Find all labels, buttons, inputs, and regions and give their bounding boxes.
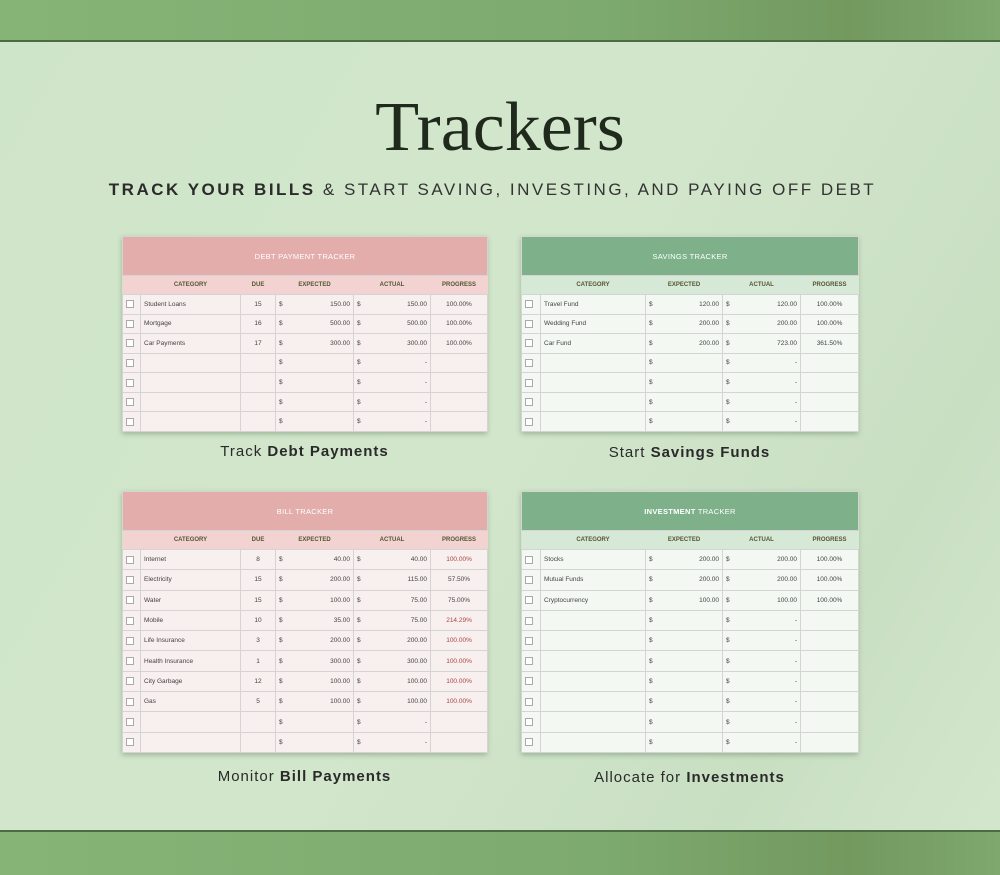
panel: savings tracker: $ (726, 340, 730, 347)
panel: debt payment tracker: 300.00 (407, 340, 427, 347)
panel: investment tracker: - (795, 617, 797, 624)
caption: savings: Start Savings Funds (609, 444, 770, 461)
panel: bill tracker: 12 (254, 678, 262, 685)
panel: debt payment tracker: 500.00 (407, 320, 427, 327)
panel: savings tracker (521, 236, 858, 432)
panel: savings tracker: $ (649, 320, 653, 327)
panel: bill tracker: 40.00 (334, 556, 350, 563)
panel: bill tracker: 5 (256, 698, 260, 705)
panel: investment tracker: ACTUAL (749, 537, 774, 543)
panel: investment tracker: EXPECTED (668, 537, 700, 543)
panel: bill tracker: 100.00% (446, 637, 472, 644)
panel: bill tracker: 214.29% (446, 617, 472, 624)
panel: investment tracker: 200.00 (699, 576, 719, 583)
panel: savings tracker: $ (726, 359, 730, 366)
panel: savings tracker: Car Fund (544, 340, 571, 347)
panel: investment tracker: 100.00% (817, 556, 842, 563)
panel: investment tracker: $ (726, 739, 730, 746)
panel: bill tracker: $ (279, 576, 283, 583)
panel: investment tracker: 100.00% (817, 576, 842, 583)
panel: savings tracker: ACTUAL (749, 282, 774, 288)
panel: debt payment tracker: 15 (254, 301, 262, 308)
panel: savings tracker: 120.00 (777, 301, 797, 308)
panel: investment tracker: - (795, 637, 797, 644)
panel: savings tracker: PROGRESS (813, 282, 847, 288)
panel: investment tracker: - (795, 678, 797, 685)
panel: investment tracker: $ (726, 617, 730, 624)
panel: debt payment tracker: 300.00 (330, 340, 350, 347)
panel: bill tracker: $ (279, 637, 283, 644)
panel: debt payment tracker: - (425, 379, 427, 386)
panel: investment tracker: 100.00 (699, 597, 719, 604)
panel: investment tracker: Cryptocurrency (544, 597, 588, 604)
panel: debt payment tracker: Mortgage (144, 320, 171, 327)
panel: investment tracker: INVESTMENT TRACKER (644, 506, 736, 516)
panel: bill tracker: 100.00 (330, 597, 350, 604)
panel: bill tracker: 100.00 (330, 698, 350, 705)
panel: bill tracker: $ (279, 719, 283, 726)
panel: debt payment tracker: $ (279, 320, 283, 327)
panel: debt payment tracker: ACTUAL (380, 282, 404, 288)
panel: investment tracker: - (795, 739, 797, 746)
panel: investment tracker: $ (649, 658, 653, 665)
panel: bill tracker: Life Insurance (144, 637, 185, 644)
panel: bill tracker: $ (357, 637, 361, 644)
panel: bill tracker: Internet (144, 556, 166, 563)
panel: bill tracker: $ (279, 597, 283, 604)
caption: debt: Track Debt Payments (220, 443, 389, 460)
panel: bill tracker: $ (357, 617, 361, 624)
panel: debt payment tracker: $ (279, 301, 283, 308)
panel: savings tracker: $ (726, 399, 730, 406)
panel: bill tracker: 75.00 (411, 617, 427, 624)
panel: savings tracker: - (795, 359, 797, 366)
panel: investment tracker: $ (726, 576, 730, 583)
panel: investment tracker: - (795, 719, 797, 726)
panel: investment tracker: $ (726, 678, 730, 685)
panel: savings tracker: $ (649, 340, 653, 347)
caption: bills: Monitor Bill Payments (218, 768, 391, 785)
panel: savings tracker: 200.00 (699, 340, 719, 347)
panel: bill tracker: 300.00 (407, 658, 427, 665)
panel: bill tracker (122, 491, 487, 753)
panel: debt payment tracker: 16 (254, 320, 262, 327)
caption: investments: Allocate for Investments (594, 769, 785, 786)
panel: debt payment tracker: $ (357, 340, 361, 347)
panel: savings tracker: Wedding Fund (544, 320, 586, 327)
panel: investment tracker: - (795, 658, 797, 665)
panel: savings tracker: $ (649, 418, 653, 425)
panel: savings tracker: SAVINGS TRACKER (652, 252, 728, 260)
panel: bill tracker: 200.00 (407, 637, 427, 644)
panel: debt payment tracker: DEBT PAYMENT TRACKER (255, 252, 355, 260)
panel: investment tracker: $ (649, 556, 653, 563)
panel: debt payment tracker: $ (357, 379, 361, 386)
panel: investment tracker: PROGRESS (812, 537, 847, 543)
panel: investment tracker (521, 491, 858, 753)
panel: debt payment tracker: DUE (252, 282, 264, 288)
panel: investment tracker: $ (649, 678, 653, 685)
panel: savings tracker: EXPECTED (668, 282, 700, 288)
panel: savings tracker: - (795, 399, 797, 406)
panel: bill tracker: - (425, 739, 427, 746)
panel: savings tracker: 361.50% (817, 340, 842, 347)
panel: investment tracker: $ (726, 597, 730, 604)
panel: bill tracker: $ (357, 576, 361, 583)
panel: bill tracker: 75.00 (411, 597, 427, 604)
panel: bill tracker: 100.00% (446, 698, 472, 705)
panel: bill tracker: $ (357, 597, 361, 604)
panel: investment tracker: $ (726, 658, 730, 665)
panel: bill tracker: 1 (256, 658, 260, 665)
panel: savings tracker: 723.00 (777, 340, 797, 347)
panel: bill tracker: Electricity (144, 576, 172, 583)
panel: bill tracker: 8 (256, 556, 260, 563)
panel: debt payment tracker: $ (279, 379, 283, 386)
panel: bill tracker: - (425, 719, 427, 726)
title: Trackers (375, 89, 625, 166)
panel: savings tracker: Travel Fund (544, 301, 578, 308)
panel: bill tracker: Water (144, 597, 161, 604)
panel: investment tracker: $ (649, 576, 653, 583)
panel: bill tracker: 100.00% (446, 658, 472, 665)
panel: savings tracker: 200.00 (699, 320, 719, 327)
panel: bill tracker: $ (357, 678, 361, 685)
panel: bill tracker: $ (357, 739, 361, 746)
panel: bill tracker: 75.00% (448, 597, 470, 604)
panel: debt payment tracker: 100.00% (446, 301, 472, 308)
panel: bill tracker: 3 (256, 637, 260, 644)
panel: bill tracker: $ (357, 698, 361, 705)
panel: bill tracker: CATEGORY (174, 537, 207, 543)
panel: savings tracker: 100.00% (817, 320, 842, 327)
panel: bill tracker: $ (279, 658, 283, 665)
bottom band (0, 830, 1000, 875)
panel: bill tracker: $ (279, 739, 283, 746)
panel: investment tracker: $ (726, 637, 730, 644)
panel: bill tracker: $ (279, 678, 283, 685)
panel: savings tracker: 200.00 (777, 320, 797, 327)
panel: debt payment tracker (122, 236, 487, 432)
panel: bill tracker: $ (279, 617, 283, 624)
panel: bill tracker: EXPECTED (298, 537, 331, 543)
panel: bill tracker: Mobile (144, 617, 163, 624)
panel: debt payment tracker: $ (279, 359, 283, 366)
panel: debt payment tracker: CATEGORY (174, 282, 207, 288)
panel: bill tracker: 200.00 (330, 576, 350, 583)
panel: savings tracker: $ (726, 320, 730, 327)
panel: bill tracker: DUE (252, 537, 264, 543)
panel: debt payment tracker: $ (357, 359, 361, 366)
panel: investment tracker: $ (649, 739, 653, 746)
panel: bill tracker: 300.00 (330, 658, 350, 665)
panel: debt payment tracker: $ (357, 301, 361, 308)
panel: debt payment tracker: Car Payments (144, 340, 185, 347)
panel: investment tracker: 200.00 (699, 556, 719, 563)
panel: bill tracker: $ (279, 698, 283, 705)
panel: investment tracker: - (795, 698, 797, 705)
panel: bill tracker: PROGRESS (442, 537, 476, 543)
panel: bill tracker: 100.00% (446, 556, 472, 563)
panel: debt payment tracker: $ (279, 418, 283, 425)
panel: debt payment tracker: $ (357, 399, 361, 406)
panel: bill tracker: $ (357, 719, 361, 726)
panel: bill tracker: 100.00% (446, 678, 472, 685)
panel: savings tracker: - (795, 418, 797, 425)
panel: bill tracker: $ (357, 556, 361, 563)
panel: bill tracker: ACTUAL (380, 537, 404, 543)
panel: investment tracker: $ (726, 556, 730, 563)
panel: savings tracker: 100.00% (817, 301, 842, 308)
panel: debt payment tracker: $ (357, 418, 361, 425)
panel: bill tracker: $ (279, 556, 283, 563)
panel: bill tracker: $ (357, 658, 361, 665)
panel: bill tracker: BILL TRACKER (277, 506, 333, 516)
panel: bill tracker: 100.00 (407, 698, 427, 705)
panel: debt payment tracker: 17 (254, 340, 262, 347)
panel: bill tracker: City Garbage (144, 678, 182, 685)
panel: bill tracker: 57.50% (448, 576, 470, 583)
panel: bill tracker: 200.00 (330, 637, 350, 644)
panel: bill tracker: 15 (254, 576, 262, 583)
panel: investment tracker: $ (649, 698, 653, 705)
panel: investment tracker: $ (649, 719, 653, 726)
panel: savings tracker: $ (726, 301, 730, 308)
panel: bill tracker: 100.00 (330, 678, 350, 685)
panel: debt payment tracker: 150.00 (330, 301, 350, 308)
panel: debt payment tracker: EXPECTED (298, 282, 331, 288)
panel: bill tracker: 115.00 (408, 576, 427, 583)
panel: investment tracker: CATEGORY (576, 537, 610, 543)
panel: investment tracker: $ (649, 617, 653, 624)
panel: investment tracker: $ (649, 637, 653, 644)
panel: investment tracker: $ (726, 719, 730, 726)
panel: bill tracker: 100.00 (407, 678, 427, 685)
panel: debt payment tracker: - (425, 399, 427, 406)
panel: bill tracker: Gas (144, 698, 156, 705)
panel: savings tracker: - (795, 379, 797, 386)
panel: savings tracker: 120.00 (699, 301, 719, 308)
subtitle: TRACK YOUR BILLS & START SAVING, INVESTING, AND PAYING OFF DEBT (109, 180, 876, 199)
panel: investment tracker: Stocks (544, 556, 564, 563)
panel: debt payment tracker: 100.00% (446, 320, 472, 327)
panel: debt payment tracker: 100.00% (446, 340, 472, 347)
panel: savings tracker: $ (649, 399, 653, 406)
panel: debt payment tracker: $ (357, 320, 361, 327)
panel: investment tracker: 100.00% (817, 597, 842, 604)
panel: savings tracker: $ (726, 379, 730, 386)
panel: debt payment tracker: PROGRESS (442, 282, 476, 288)
panel: investment tracker: $ (726, 698, 730, 705)
panel: investment tracker: 100.00 (777, 597, 797, 604)
panel: investment tracker: 200.00 (777, 556, 797, 563)
panel: debt payment tracker: 500.00 (330, 320, 350, 327)
panel: savings tracker: $ (726, 418, 730, 425)
panel: savings tracker: $ (649, 379, 653, 386)
panel: debt payment tracker: 150.00 (407, 301, 427, 308)
panel: bill tracker: 10 (254, 617, 262, 624)
panel: bill tracker: 35.00 (334, 617, 350, 624)
panel: investment tracker: $ (649, 597, 653, 604)
panel: debt payment tracker: $ (279, 340, 283, 347)
panel: debt payment tracker: $ (279, 399, 283, 406)
panel: debt payment tracker: - (425, 359, 427, 366)
top band (0, 0, 1000, 42)
panel: savings tracker: $ (649, 359, 653, 366)
panel: bill tracker: 15 (254, 597, 262, 604)
panel: debt payment tracker: - (425, 418, 427, 425)
panel: savings tracker: CATEGORY (576, 282, 610, 288)
panel: debt payment tracker: Student Loans (144, 301, 186, 308)
panel: investment tracker: 200.00 (777, 576, 797, 583)
panel: bill tracker: Health Insurance (144, 658, 193, 665)
panel: bill tracker: 40.00 (411, 556, 427, 563)
panel: savings tracker: $ (649, 301, 653, 308)
panel: investment tracker: Mutual Funds (544, 576, 583, 583)
